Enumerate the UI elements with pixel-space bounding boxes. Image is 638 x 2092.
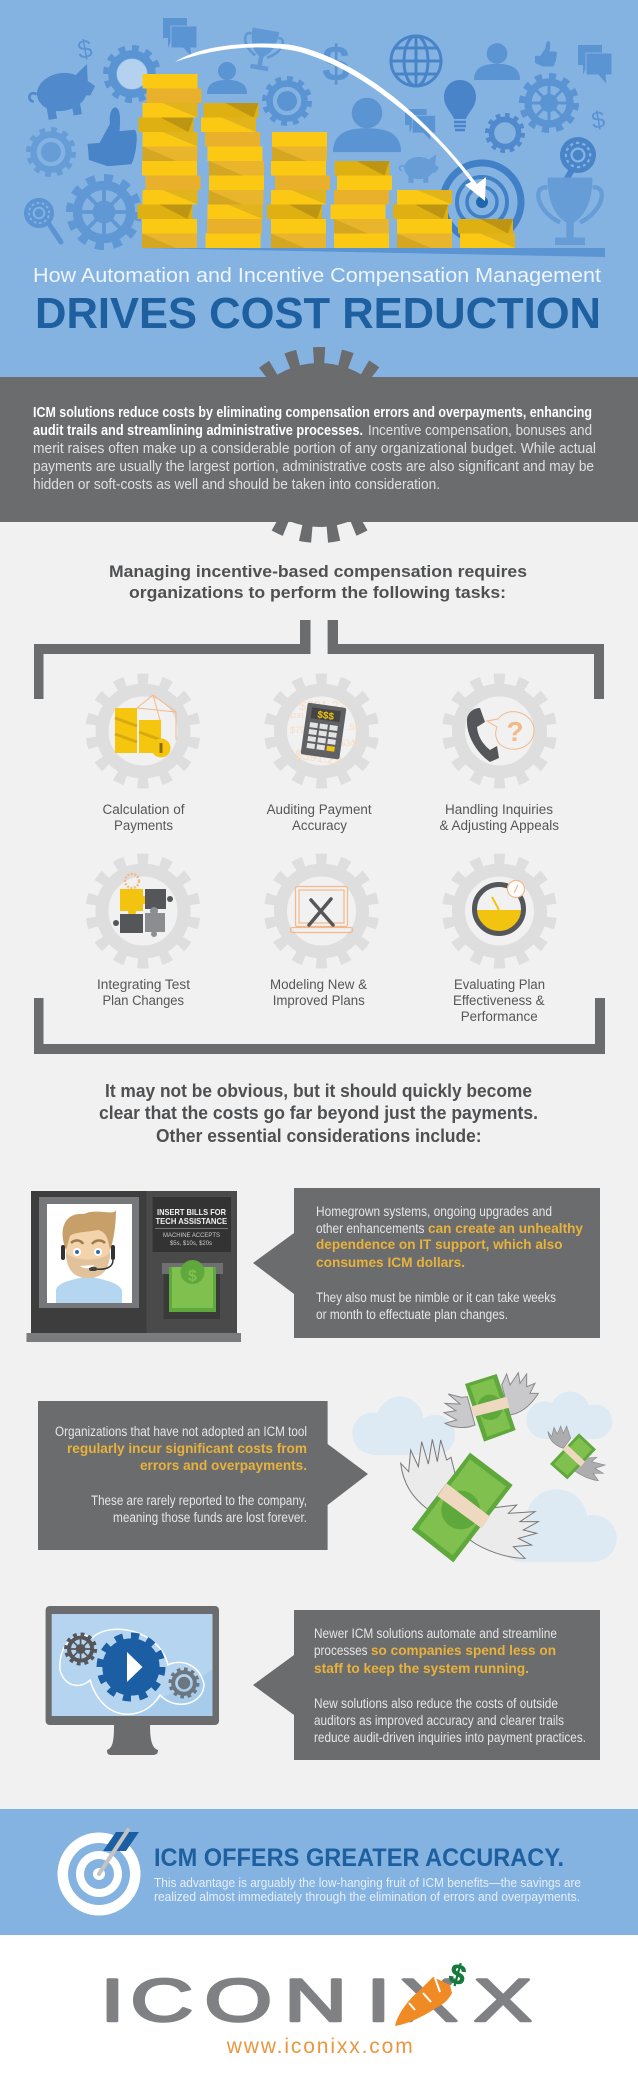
icon: gear right spoked bbox=[522, 76, 576, 130]
icon: magnifier left bbox=[26, 200, 61, 242]
panel: accuracy band bbox=[0, 1809, 638, 1935]
icon: thumb small bbox=[535, 41, 557, 66]
faded figures bbox=[289, 698, 360, 768]
icon: dollar sign left: $ bbox=[75, 33, 95, 65]
considerations heading bbox=[99, 1081, 538, 1146]
faded figures: .55 bbox=[347, 722, 360, 732]
stack 4 bbox=[330, 161, 392, 248]
band background bbox=[0, 377, 638, 522]
callout: errors and overpayments bbox=[38, 1401, 368, 1550]
faded figures: $391.22 bbox=[299, 698, 346, 713]
callout text: Newer ICM solutions automate and streamline bbox=[314, 1626, 557, 1641]
icon: person right bbox=[474, 43, 520, 80]
website url: www.iconixx.com bbox=[226, 2035, 413, 2058]
arrow bbox=[175, 44, 486, 201]
task: evaluating plan effectiveness bbox=[441, 853, 558, 1024]
callout text: reduce audit-driven inquiries into payment practices. bbox=[314, 1730, 586, 1745]
faded figures: $345 bbox=[340, 738, 360, 748]
tools bbox=[309, 899, 333, 925]
callout text: Homegrown systems, ongoing upgrades and bbox=[316, 1204, 552, 1219]
carrot notches bbox=[409, 1978, 440, 2010]
panel: light body background bbox=[0, 522, 638, 1809]
dollar bill: $ bbox=[188, 1268, 197, 1285]
intro text: merit raises often make up a considerable portion of any organizational budget. While actual bbox=[33, 441, 596, 457]
illustration: tech support kiosk: INSERT BILLS FOR bbox=[157, 1207, 226, 1217]
icon: large gear bbox=[70, 178, 138, 246]
label bbox=[267, 802, 372, 833]
callout text: processes bbox=[314, 1643, 368, 1658]
stack 3 bbox=[267, 132, 330, 248]
icon: trophy right bbox=[538, 178, 602, 245]
label: Effectiveness & bbox=[453, 993, 544, 1008]
callout text: auditors as improved accuracy and clearer trails bbox=[314, 1713, 564, 1728]
envelope outline bbox=[137, 695, 176, 740]
considerations heading: It may not be obvious, but it should quickly become bbox=[105, 1081, 532, 1101]
phone bbox=[467, 708, 499, 762]
task: integrating test plan changes bbox=[85, 853, 201, 1008]
screen frame bbox=[39, 1197, 139, 1308]
callout text bbox=[314, 1626, 586, 1745]
logo carrot bbox=[395, 1977, 452, 2026]
clouds bbox=[352, 1392, 617, 1562]
small orange gear bbox=[125, 874, 139, 888]
label: Performance bbox=[461, 1009, 538, 1024]
label bbox=[440, 802, 559, 833]
callout text: New solutions also reduce the costs of outside bbox=[314, 1696, 558, 1711]
accuracy text: realized almost immediately through the elimination of errors and overpayments. bbox=[154, 1890, 580, 1904]
illustration: tech support kiosk bbox=[26, 1191, 241, 1342]
header icon cloud bbox=[25, 18, 612, 246]
callout: spend less on staff bbox=[253, 1610, 600, 1760]
speech bubble bbox=[487, 712, 534, 749]
screen bbox=[52, 1614, 213, 1716]
callout text: These are rarely reported to the company, bbox=[91, 1493, 307, 1508]
icon: chat bubbles middle bbox=[405, 109, 436, 141]
gear bbox=[441, 853, 558, 969]
gear bbox=[441, 673, 558, 789]
panel: intro band bbox=[0, 343, 638, 547]
gear bbox=[85, 673, 201, 789]
faded figures: $391.22 bbox=[294, 747, 343, 768]
bracket top bbox=[34, 620, 604, 699]
illustration: tech support kiosk: MACHINE ACCEPTS bbox=[163, 1233, 220, 1239]
kiosk base bbox=[26, 1333, 241, 1342]
label: Payments bbox=[114, 818, 173, 833]
ground line bbox=[142, 248, 605, 257]
label: Evaluating Plan bbox=[454, 977, 545, 992]
icon: piggy bank bbox=[25, 63, 99, 123]
illustration: tech support kiosk: TECH ASSISTANCE bbox=[156, 1216, 227, 1226]
puzzle pieces bbox=[113, 889, 173, 937]
label: Accuracy bbox=[292, 818, 347, 833]
cloud outline bbox=[60, 1629, 204, 1714]
icon: gear centre bbox=[264, 78, 310, 124]
faded figures: $79 bbox=[290, 725, 305, 735]
illustration: monitor with gears bbox=[46, 1606, 219, 1755]
icon: chat bubbles right bbox=[578, 45, 612, 85]
considerations heading: Other essential considerations include: bbox=[156, 1126, 482, 1146]
illustration: tech support kiosk: $5s, $10s, $20s bbox=[170, 1241, 212, 1247]
icon: hollow gear bbox=[106, 48, 158, 100]
callout box bbox=[253, 1610, 600, 1760]
panel: header background bbox=[0, 0, 638, 380]
label: Improved Plans bbox=[273, 993, 365, 1008]
intro text: audit trails and streamlining administrative processes. bbox=[33, 423, 363, 439]
label: Calculation of bbox=[102, 802, 185, 817]
callout text bbox=[55, 1424, 307, 1525]
left gear bbox=[66, 1634, 95, 1664]
callout text: so companies spend less on bbox=[371, 1643, 556, 1658]
kiosk body bbox=[31, 1191, 237, 1333]
illustration: money flying away bbox=[352, 1373, 617, 1562]
logo: iconixx bbox=[100, 1957, 532, 2034]
small dial bbox=[508, 880, 524, 898]
callout box bbox=[38, 1401, 368, 1550]
label: Plan Changes bbox=[102, 993, 184, 1008]
icon: small gear right bbox=[487, 115, 523, 151]
icon: person small bbox=[207, 62, 247, 94]
right gear bbox=[170, 1669, 198, 1697]
icon: dollar right: $ bbox=[589, 106, 607, 135]
panel: footer background bbox=[0, 1935, 638, 2092]
label: Handling Inquiries bbox=[445, 802, 553, 817]
callout text: dependence on IT support, which also bbox=[316, 1237, 562, 1252]
icon: light bulb bbox=[444, 80, 476, 130]
callout text: Organizations that have not adopted an ICM tool bbox=[55, 1424, 307, 1439]
label: Integrating Test bbox=[97, 977, 190, 992]
icon: gear left bbox=[28, 130, 74, 174]
bill slot bbox=[164, 1273, 220, 1319]
monitor frame bbox=[46, 1606, 219, 1725]
label bbox=[270, 977, 367, 1008]
gear behind band bbox=[217, 343, 422, 547]
callout text bbox=[316, 1204, 583, 1322]
task: handling inquiries: ? bbox=[506, 716, 524, 747]
faded figures: $191 bbox=[289, 713, 305, 720]
icon: small piggy bbox=[399, 154, 439, 183]
main blue gear bbox=[100, 1636, 162, 1698]
dollar bill bbox=[169, 1260, 216, 1312]
play icon bbox=[127, 1652, 142, 1682]
tasks heading: organizations to perform the following tasks: bbox=[129, 583, 506, 602]
small winged bill bbox=[548, 1426, 605, 1481]
gauge bbox=[477, 910, 521, 933]
intro text: payments are usually the largest portion, administrative costs are also significant and may be bbox=[33, 459, 594, 475]
intro text bbox=[33, 405, 596, 493]
accuracy text bbox=[154, 1876, 581, 1904]
task: auditing payment accuracy bbox=[263, 673, 380, 833]
label bbox=[453, 977, 545, 1024]
callout box bbox=[253, 1188, 600, 1338]
label: & Adjusting Appeals bbox=[440, 818, 559, 833]
intro text: hidden or soft-costs as well and should be taken into consideration. bbox=[33, 477, 440, 493]
stack 2 bbox=[201, 103, 264, 248]
task: handling inquiries bbox=[440, 673, 559, 833]
task: modeling new plans bbox=[263, 853, 380, 1008]
instruction panel bbox=[153, 1197, 231, 1252]
label bbox=[102, 802, 185, 833]
large winged bill bbox=[401, 1439, 538, 1562]
callout text: regularly incur significant costs from bbox=[67, 1441, 307, 1456]
gear bbox=[263, 673, 380, 789]
calculator bbox=[301, 703, 346, 760]
bracket bottom bbox=[34, 998, 605, 1054]
icon: target bbox=[443, 163, 521, 241]
callout text: meaning those funds are lost forever. bbox=[113, 1510, 307, 1525]
icon: dollar large: $ bbox=[322, 36, 350, 92]
icon: thumbs up bbox=[85, 106, 139, 168]
label: Modeling New & bbox=[270, 977, 367, 992]
callout text: other enhancements bbox=[316, 1221, 425, 1236]
logo wordmark: ICONIXX bbox=[100, 1966, 532, 2034]
chart: shrinking coin stacks bbox=[138, 74, 515, 248]
callout: IT support bbox=[253, 1188, 600, 1338]
icon: person large bbox=[333, 98, 401, 152]
callout text: staff to keep the system running. bbox=[314, 1661, 529, 1676]
stack 6 bbox=[458, 219, 515, 248]
accuracy text: This advantage is arguably the low-hanging fruit of ICM benefits—the savings are bbox=[154, 1876, 581, 1890]
callout text: They also must be nimble or it can take weeks bbox=[316, 1290, 556, 1305]
coins bbox=[115, 708, 161, 753]
medium winged bill bbox=[444, 1373, 538, 1442]
considerations heading: clear that the costs go far beyond just the payments. bbox=[99, 1103, 538, 1123]
tasks heading bbox=[109, 562, 527, 602]
title line: How Automation and Incentive Compensation Management bbox=[33, 265, 601, 287]
intro text: Incentive compensation, bonuses and bbox=[368, 423, 592, 439]
callout text: can create an unhealthy bbox=[428, 1221, 583, 1236]
callout text: consumes ICM dollars. bbox=[316, 1255, 465, 1270]
stack 1 bbox=[138, 74, 202, 248]
accuracy heading: ICM OFFERS GREATER ACCURACY. bbox=[154, 1844, 564, 1872]
icon: chat bubbles bbox=[163, 18, 197, 58]
icon: target with dart bbox=[58, 1830, 140, 1916]
label: Auditing Payment bbox=[267, 802, 372, 817]
callout text: or month to effectuate plan changes. bbox=[316, 1307, 508, 1322]
task: calculation of payments bbox=[85, 673, 201, 833]
icon: small trophy bbox=[240, 27, 285, 73]
logo dollar: $ bbox=[446, 1957, 470, 1992]
band background bbox=[0, 1809, 638, 1935]
callout text: errors and overpayments. bbox=[140, 1458, 307, 1473]
gear bbox=[263, 853, 380, 969]
laptop outline bbox=[290, 886, 352, 932]
gear bbox=[85, 853, 201, 969]
stack 5 bbox=[393, 190, 452, 248]
stand bbox=[107, 1725, 158, 1755]
support agent bbox=[56, 1210, 122, 1303]
main heading: DRIVES COST REDUCTION bbox=[35, 289, 601, 338]
calculator: $$$ bbox=[317, 710, 335, 723]
icon: globe bbox=[391, 36, 441, 86]
label bbox=[97, 977, 190, 1008]
tasks heading: Managing incentive-based compensation requires bbox=[109, 562, 527, 581]
icon: magnifier right bbox=[540, 134, 603, 194]
